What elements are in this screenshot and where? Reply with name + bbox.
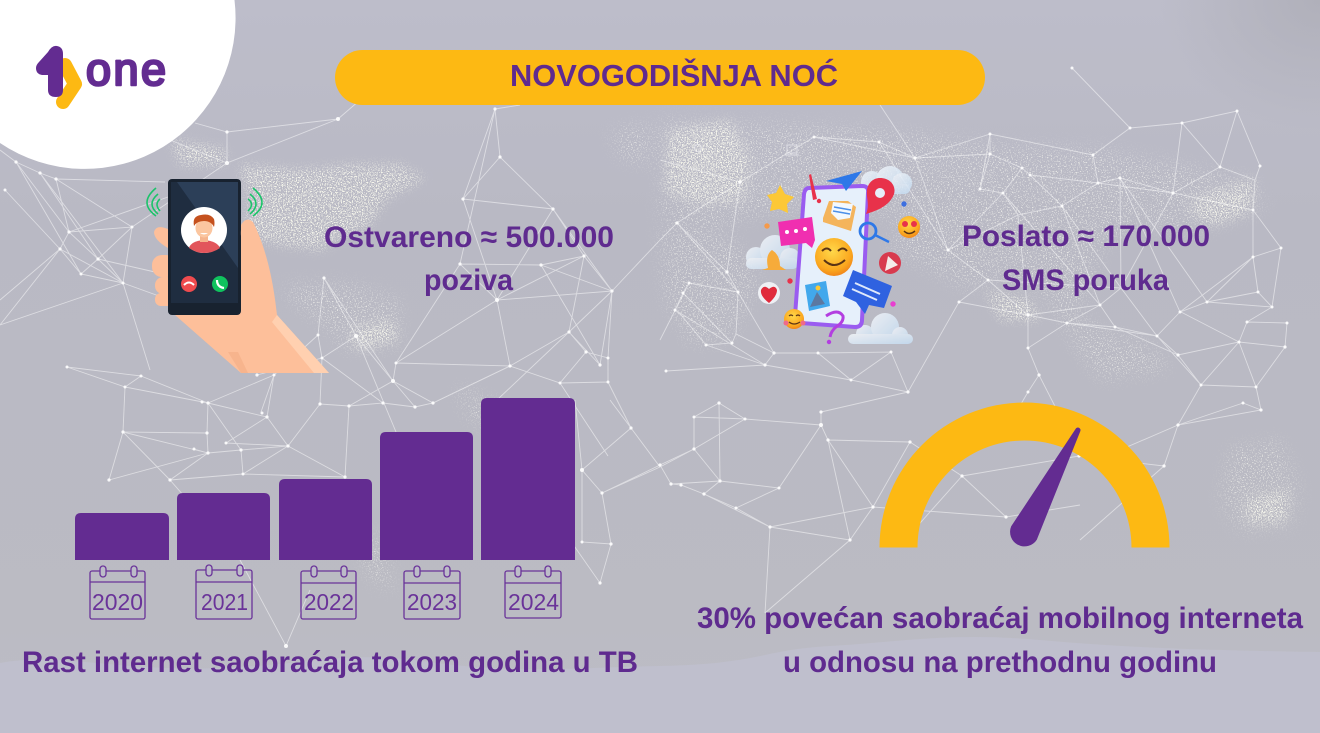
calendar 2023 <box>404 566 460 619</box>
small hugging emoji <box>784 309 804 329</box>
big smiling emoji <box>815 238 853 276</box>
signal arcs <box>147 188 262 216</box>
title pill: NOVOGODIŠNJA NOĆ <box>510 57 838 93</box>
thumb over phone edge <box>241 220 262 300</box>
blue chat bubble <box>843 270 892 314</box>
calendar icons with years <box>90 565 561 619</box>
text: calls: poziva <box>424 264 513 297</box>
calendar 2022: 2022 <box>304 589 354 615</box>
logo: 1one: one <box>86 44 166 95</box>
clouds <box>746 166 913 344</box>
calendar 2023: 2023 <box>407 589 457 615</box>
accept button <box>212 276 228 292</box>
calendar 2021 <box>196 565 252 619</box>
envelope <box>823 201 856 231</box>
white corner circle with logo <box>0 0 236 169</box>
calendar 2020: 2020 <box>92 589 143 615</box>
icon: smartphone with messages and emoji <box>746 166 920 344</box>
phone body <box>168 179 241 315</box>
network lines <box>0 68 1287 646</box>
calendar 2022 <box>301 566 356 619</box>
heart <box>758 282 780 304</box>
magnifier <box>860 223 876 239</box>
location pin <box>866 178 895 214</box>
small device glyphs <box>694 144 799 155</box>
text: gauge caption: 30% povećan saobraćaj mobilnog interneta <box>697 602 1303 635</box>
title pill <box>335 50 985 105</box>
decline button <box>181 276 197 292</box>
calendar 2024 <box>505 566 561 618</box>
text: SMS <box>962 220 1210 297</box>
logo: 1one <box>36 44 166 102</box>
hand <box>175 220 329 373</box>
gauge: mobile internet speedometer <box>880 402 1170 548</box>
heart-eyes emoji <box>898 216 920 238</box>
text: gauge caption: u odnosu na prethodnu godinu <box>783 646 1217 679</box>
text: SMS: Poslato ≈ 170.000 <box>962 220 1210 253</box>
text: calls: Ostvareno ≈ 500.000 <box>324 221 614 254</box>
bar chart: internet traffic 2020-2024 <box>75 398 575 560</box>
calendar 2021: 2021 <box>201 589 248 615</box>
phone frame <box>795 186 868 327</box>
question mark <box>826 312 843 337</box>
text: chart caption: Rast internet saobraćaja tokom godina u TB <box>22 646 638 679</box>
caller avatar <box>181 207 227 253</box>
text: gauge caption <box>697 602 1303 679</box>
exclamation <box>809 174 817 200</box>
decorative dots <box>901 201 907 207</box>
city lights sparse <box>285 120 1298 590</box>
network nodes <box>4 66 1288 648</box>
play button <box>879 252 901 274</box>
text: calls <box>324 221 614 297</box>
paper plane <box>826 171 862 191</box>
calendar 2020 <box>90 566 145 619</box>
image tile <box>805 281 830 311</box>
bell <box>762 250 786 270</box>
city lights dense <box>172 120 1288 524</box>
icon: hand holding phone with incoming call <box>147 179 329 373</box>
text: SMS: SMS poruka <box>1002 264 1169 297</box>
pink chat bubble <box>778 217 815 248</box>
calendar 2024: 2024 <box>508 589 559 615</box>
star <box>767 185 794 213</box>
